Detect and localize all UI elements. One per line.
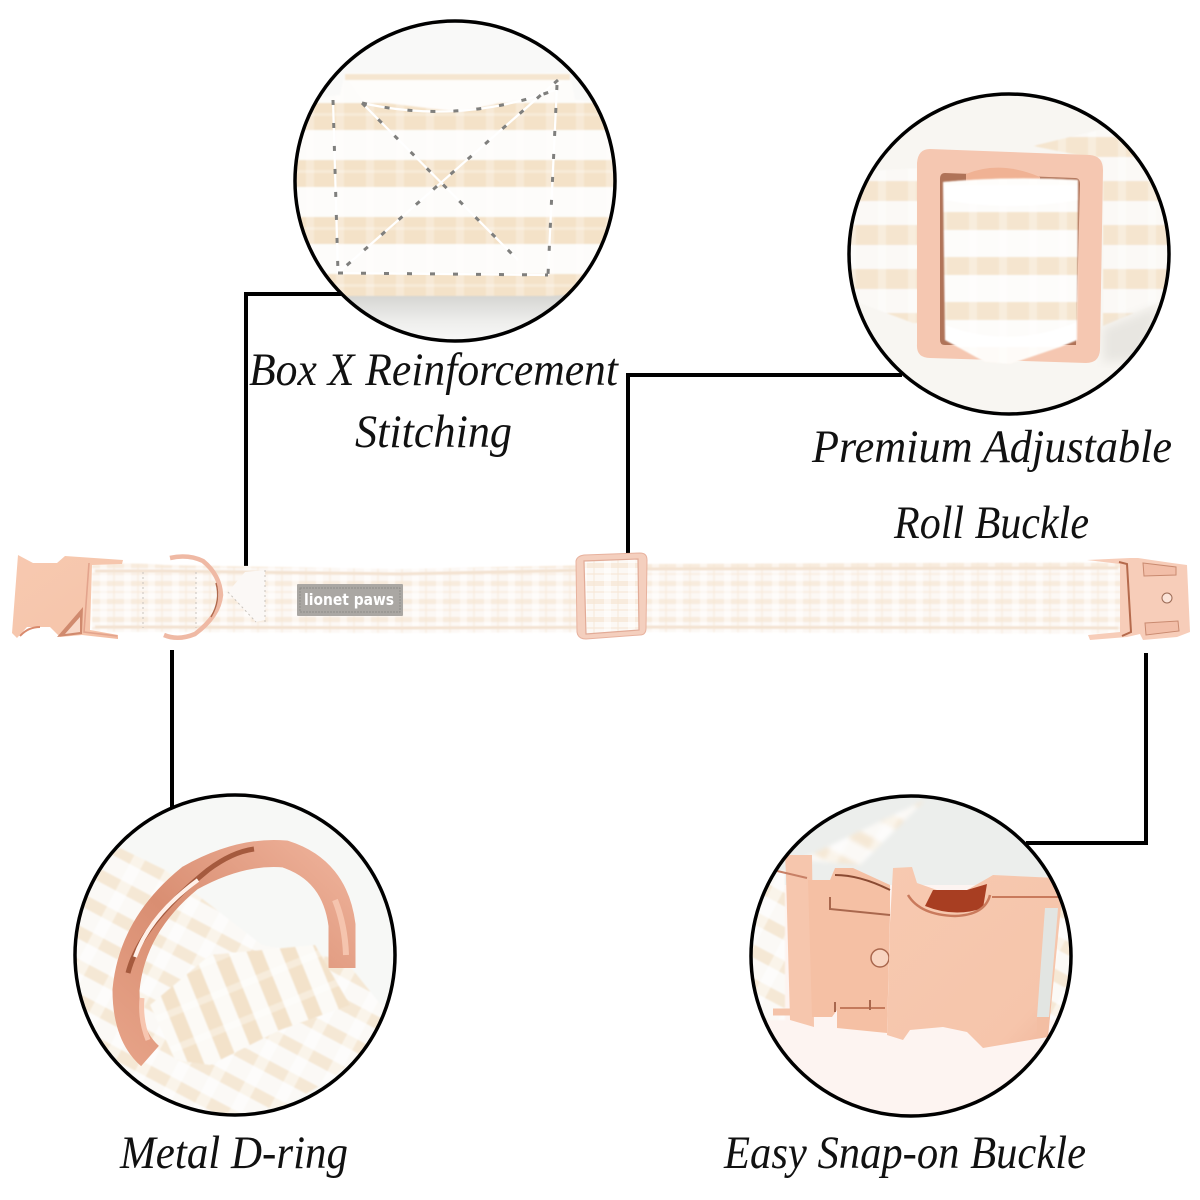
male buckle frame [785,855,814,1027]
left fabric strap [752,870,786,1020]
looped fabric [150,945,350,1065]
caption: box X reinforcement stitching [249,344,619,458]
D-ring metal [126,849,346,1056]
caption: box X reinforcement stitching: Box X Reinforcement [249,344,619,396]
caption: premium adjustable roll buckle [811,421,1172,549]
female buckle body [887,867,1062,1048]
rose gold frame [917,149,1103,363]
fabric roll [943,178,1078,364]
brand label [297,584,403,616]
circle outline [751,796,1071,1116]
male buckle tongue [808,868,890,1033]
panel: box X reinforcement stitching close-up [293,19,617,343]
panel: roll buckle close-up [845,90,1175,420]
close-up background and fabric [296,73,614,339]
close-up photo contents [70,790,400,1120]
connector line: snap-on buckle [1026,653,1146,843]
caption: premium adjustable roll buckle: Premium Adjustable [811,421,1172,473]
circle outline [75,795,395,1115]
panel: snap-on buckle close-up [745,790,1080,1125]
caption: metal D-ring: Metal D-ring [119,1127,348,1179]
panel: metal D-ring close-up [70,790,400,1120]
close-up photo contents [845,90,1175,420]
strap window [1037,908,1058,1017]
caption: box X reinforcement stitching: Stitching [355,406,512,458]
adjustable slider [576,553,647,639]
circle outline [849,94,1169,414]
background fabric band [845,128,1175,326]
reinforcement stitching patch [143,570,265,628]
connector line: D-ring [170,650,174,808]
side release buckle, female end [12,555,123,639]
back fabric [76,848,370,1102]
red inner of buckle [925,884,987,913]
X stitching [333,80,558,275]
side release buckle, male end [1087,558,1190,640]
caption: premium adjustable roll buckle: Roll Buckle [893,497,1089,549]
brand label: lionet paws [304,590,394,609]
close-up photo contents [752,798,1070,1114]
collar product photo [12,553,1190,640]
collar webbing [92,562,1122,634]
caption: easy snap-on buckle: Easy Snap-on Buckle [723,1127,1086,1179]
metal D-ring [164,557,221,638]
connector line: box stitching [246,294,342,566]
connector line: roll buckle [628,375,902,554]
circle outline [295,21,615,341]
